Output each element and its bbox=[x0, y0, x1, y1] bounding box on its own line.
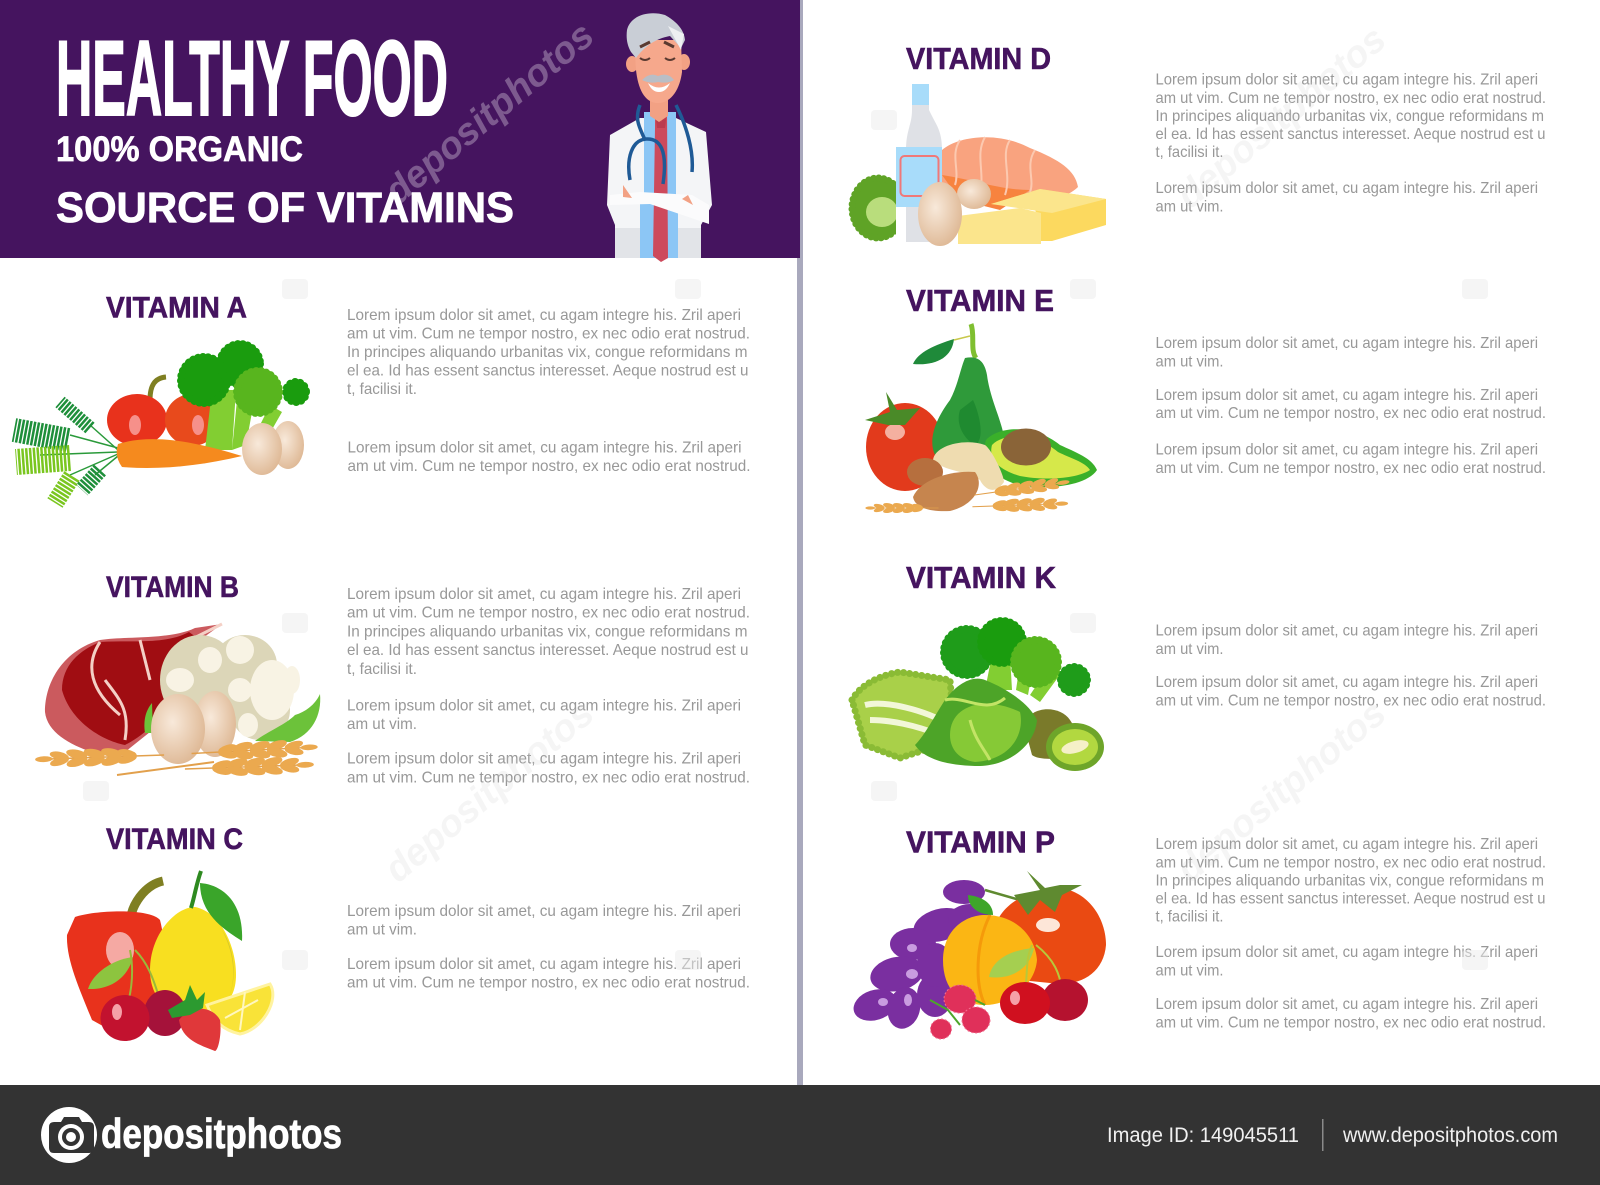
text block: vitamin E: am ut vim. Cum ne tempor nostro, ex nec odio erat nostrud. bbox=[1156, 460, 1546, 477]
text block: vitamin B bbox=[347, 586, 750, 786]
heading: vitamin C: VITAMIN C bbox=[106, 823, 243, 856]
text block: vitamin E: am ut vim. bbox=[1156, 354, 1224, 371]
text block: vitamin C bbox=[347, 903, 750, 992]
text block: vitamin B: am ut vim. Cum ne tempor nostro, ex nec odio erat nostrud. bbox=[347, 605, 750, 622]
heading: vitamin B: VITAMIN B bbox=[106, 571, 239, 604]
text block: vitamin B: am ut vim. bbox=[347, 716, 417, 733]
text block: vitamin P: Lorem ipsum dolor sit amet, cu agam integre his. Zril aperi bbox=[1156, 996, 1538, 1013]
text block: vitamin P: am ut vim. Cum ne tempor nostro, ex nec odio erat nostrud. bbox=[1156, 854, 1546, 871]
header banner: HEALTHY FOOD bbox=[56, 18, 448, 138]
panel: vitamin A bbox=[14, 292, 750, 503]
text block: vitamin P: Lorem ipsum dolor sit amet, cu agam integre his. Zril aperi bbox=[1156, 944, 1538, 961]
heading: vitamin A: VITAMIN A bbox=[106, 292, 247, 324]
text block: vitamin K: Lorem ipsum dolor sit amet, cu agam integre his. Zril aperi bbox=[1156, 674, 1538, 691]
logo: depositphotos bbox=[41, 1107, 342, 1163]
text block: vitamin P: t, facilisi it. bbox=[1156, 908, 1224, 925]
text block: vitamin E: Lorem ipsum dolor sit amet, cu agam integre his. Zril aperi bbox=[1156, 387, 1538, 404]
text block: vitamin E: am ut vim. Cum ne tempor nostro, ex nec odio erat nostrud. bbox=[1156, 405, 1546, 422]
text block: vitamin B: el ea. Id has essent sanctus interesset. Aeque nostrud est u bbox=[347, 642, 748, 659]
watermarks on white panels: depositphotos bbox=[1169, 18, 1394, 217]
text block: vitamin E bbox=[1156, 335, 1546, 477]
heading: vitamin D: VITAMIN D bbox=[906, 41, 1051, 76]
text block: vitamin K bbox=[1156, 623, 1546, 710]
text block: vitamin K: am ut vim. bbox=[1156, 641, 1224, 658]
text block: vitamin P: am ut vim. bbox=[1156, 962, 1224, 980]
text block: vitamin A: t, facilisi it. bbox=[347, 381, 417, 398]
illustration: vitamin E foods bbox=[865, 324, 1097, 515]
text block: vitamin D: In principes aliquando urbanitas vix, congue reformidans m bbox=[1156, 108, 1544, 125]
logo: depositphotos: depositphotos bbox=[101, 1110, 342, 1157]
text block: vitamin D: Lorem ipsum dolor sit amet, cu agam integre his. Zril aperi bbox=[1156, 180, 1538, 197]
website url: www.depositphotos.com bbox=[1342, 1124, 1558, 1147]
text block: vitamin A: Lorem ipsum dolor sit amet, cu agam integre his. Zril aperi bbox=[347, 307, 741, 324]
text block: vitamin B: In principes aliquando urbanitas vix, congue reformidans m bbox=[347, 624, 748, 641]
text block: vitamin P: am ut vim. Cum ne tempor nostro, ex nec odio erat nostrud. bbox=[1156, 1014, 1546, 1031]
illustration: vitamin B foods bbox=[35, 624, 320, 780]
text block: vitamin A bbox=[347, 307, 750, 475]
panel: vitamin K bbox=[852, 560, 1546, 771]
illustration: vitamin A foods bbox=[14, 344, 306, 503]
panel: vitamin D bbox=[852, 41, 1546, 246]
text block: vitamin A: am ut vim. Cum ne tempor nostro, ex nec odio erat nostrud. bbox=[347, 326, 750, 342]
watermarks on white panels: depositphotos bbox=[377, 692, 602, 891]
watermark: depositphotos header: depositphotos bbox=[377, 14, 602, 213]
text block: vitamin C: Lorem ipsum dolor sit amet, cu agam integre his. Zril aperi bbox=[347, 903, 741, 920]
text block: vitamin D: t, facilisi it. bbox=[1156, 144, 1224, 161]
text block: vitamin C: Lorem ipsum dolor sit amet, cu agam integre his. Zril aperi bbox=[347, 956, 741, 973]
header banner bbox=[0, 0, 800, 262]
text block: vitamin D: am ut vim. Cum ne tempor nostro, ex nec odio erat nostrud. bbox=[1156, 90, 1546, 107]
text block: vitamin P: Lorem ipsum dolor sit amet, cu agam integre his. Zril aperi bbox=[1156, 836, 1538, 853]
illustration: vitamin K foods bbox=[852, 621, 1104, 771]
text block: vitamin B: Lorem ipsum dolor sit amet, cu agam integre his. Zril aperi bbox=[347, 698, 741, 715]
text block: vitamin D: el ea. Id has essent sanctus interesset. Aeque nostrud est u bbox=[1156, 126, 1546, 143]
footer bar bbox=[0, 1085, 1600, 1185]
divider between columns bbox=[797, 0, 803, 1085]
text block: vitamin B: t, facilisi it. bbox=[347, 661, 417, 678]
text block: vitamin A: am ut vim. Cum ne tempor nostro, ex nec odio erat nostrud. bbox=[348, 458, 750, 475]
text block: vitamin P: el ea. Id has essent sanctus interesset. Aeque nostrud est u bbox=[1156, 890, 1546, 908]
text block: vitamin D: Lorem ipsum dolor sit amet, cu agam integre his. Zril aperi bbox=[1156, 72, 1538, 88]
heading: vitamin K: VITAMIN K bbox=[906, 560, 1057, 595]
text block: vitamin D bbox=[1156, 72, 1546, 215]
illustration: vitamin C foods bbox=[67, 871, 273, 1051]
text block: vitamin E: Lorem ipsum dolor sit amet, cu agam integre his. Zril aperi bbox=[1156, 442, 1538, 459]
text block: vitamin C: am ut vim. bbox=[347, 922, 417, 938]
subtitle: source of vitamins: SOURCE OF VITAMINS bbox=[56, 184, 514, 232]
text block: vitamin D: am ut vim. bbox=[1156, 198, 1224, 215]
panel: vitamin C bbox=[67, 823, 750, 1051]
text block: vitamin B: am ut vim. Cum ne tempor nostro, ex nec odio erat nostrud. bbox=[347, 769, 750, 786]
illustration: vitamin D foods bbox=[852, 84, 1106, 246]
panel: vitamin E bbox=[865, 283, 1546, 515]
heading: vitamin E: VITAMIN E bbox=[906, 283, 1054, 318]
text block: vitamin A: In principes aliquando urbanitas vix, congue reformidans m bbox=[347, 344, 748, 361]
text block: vitamin P bbox=[1156, 836, 1546, 1031]
text block: vitamin A: el ea. Id has essent sanctus interesset. Aeque nostrud est u bbox=[347, 362, 748, 380]
text block: vitamin B: Lorem ipsum dolor sit amet, cu agam integre his. Zril aperi bbox=[347, 586, 741, 603]
text block: vitamin P: In principes aliquando urbanitas vix, congue reformidans m bbox=[1156, 873, 1544, 890]
subtitle: 100% organic: 100% ORGANIC bbox=[56, 130, 303, 169]
text block: vitamin E: Lorem ipsum dolor sit amet, cu agam integre his. Zril aperi bbox=[1156, 335, 1538, 352]
illustration: vitamin P foods bbox=[849, 871, 1106, 1039]
heading: vitamin P: VITAMIN P bbox=[906, 824, 1055, 860]
text block: vitamin K: Lorem ipsum dolor sit amet, cu agam integre his. Zril aperi bbox=[1156, 623, 1538, 640]
watermarks on white panels bbox=[83, 18, 1488, 970]
watermarks on white panels: depositphotos bbox=[1169, 692, 1394, 891]
panel: vitamin B bbox=[35, 571, 750, 786]
panel: vitamin P bbox=[849, 824, 1546, 1039]
text block: vitamin A: Lorem ipsum dolor sit amet, cu agam integre his. Zril aperi bbox=[348, 440, 742, 456]
image id: Image ID: 149045511 bbox=[1107, 1124, 1299, 1147]
illustration: doctor bbox=[607, 13, 712, 262]
text block: vitamin K: am ut vim. Cum ne tempor nostro, ex nec odio erat nostrud. bbox=[1156, 692, 1546, 710]
text block: vitamin B: Lorem ipsum dolor sit amet, cu agam integre his. Zril aperi bbox=[347, 751, 741, 768]
text block: vitamin C: am ut vim. Cum ne tempor nostro, ex nec odio erat nostrud. bbox=[347, 974, 750, 992]
